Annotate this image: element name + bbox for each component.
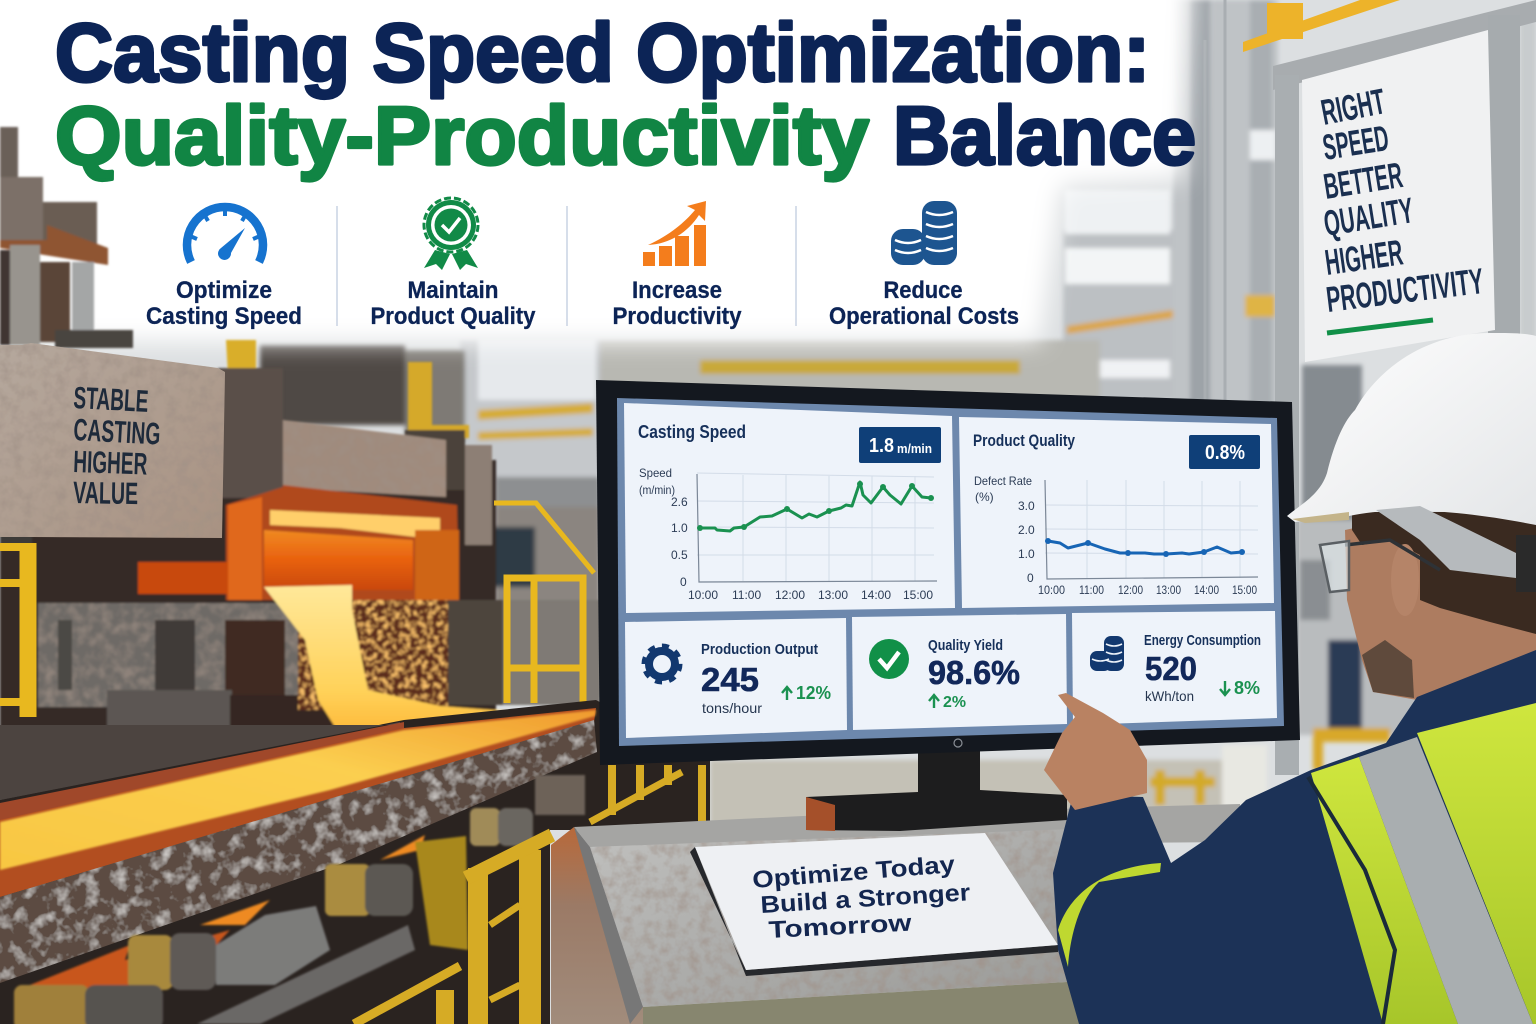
slab top surface xyxy=(0,708,596,897)
benefit text: costs xyxy=(829,277,1019,330)
paper note: Optimize Today xyxy=(751,851,957,894)
kpi: energy consumption: kWh/ton xyxy=(1145,688,1194,704)
panel: product quality chart: (%) xyxy=(975,490,994,504)
title: Casting Speed Optimization: xyxy=(55,6,1150,99)
furnace machinery xyxy=(0,340,600,810)
icon: quality rosette xyxy=(424,198,478,270)
hi-vis vest xyxy=(1311,757,1458,1024)
title xyxy=(55,6,1196,182)
panel: product quality chart: 1.0 xyxy=(1018,547,1035,561)
ear xyxy=(1391,544,1419,616)
worker xyxy=(1044,333,1536,1024)
benefit text: costs: Reduce xyxy=(884,277,962,304)
benefit text: costs: Operational Costs xyxy=(829,303,1019,330)
sign: stable casting xyxy=(0,343,225,538)
kpi: production output: 245 xyxy=(701,661,759,698)
panel: product quality chart: 0 xyxy=(1027,571,1034,585)
hair xyxy=(1352,512,1536,634)
panel: casting speed chart: 15:00 xyxy=(903,588,933,602)
line chart: speed xyxy=(697,481,934,531)
second rust plate xyxy=(283,420,446,497)
icon: coin stacks xyxy=(891,201,957,265)
panel: product quality chart: 10:00 xyxy=(1038,583,1065,597)
sign: stable casting: HIGHER xyxy=(73,444,148,482)
sign frame and yellow gantry xyxy=(1243,0,1536,775)
grey machinery xyxy=(38,603,298,707)
panel: product quality chart: Product Quality xyxy=(973,431,1075,450)
panel: product quality chart: 11:00 xyxy=(1079,583,1104,597)
title: Balance xyxy=(893,89,1196,182)
panel: casting speed chart: 0 xyxy=(680,575,687,589)
glasses xyxy=(1345,540,1440,570)
kpi: quality yield: 98.6% xyxy=(928,654,1020,691)
overhead sign: RIGHT xyxy=(1318,80,1388,133)
worker jacket xyxy=(1053,650,1536,1024)
line chart: defect rate xyxy=(1045,538,1245,557)
sign: stable casting: VALUE xyxy=(73,475,138,511)
benefit text: quality xyxy=(370,277,536,330)
rollers and brackets xyxy=(14,775,585,1024)
panel: casting speed chart: 13:00 xyxy=(818,588,848,602)
benefit text: optimize: Casting Speed xyxy=(146,303,302,330)
slab front face xyxy=(0,720,597,983)
panel: casting speed chart: 2.6 xyxy=(671,495,688,509)
benefit text: productivity: Productivity xyxy=(612,303,742,330)
kpi: quality yield: 2% xyxy=(943,694,966,711)
kpi: quality yield xyxy=(852,614,1067,730)
steel console xyxy=(551,804,1240,1024)
panel: casting speed chart: Casting Speed xyxy=(638,422,746,442)
icon: growth chart xyxy=(643,201,706,266)
kpi: production output: tons/hour xyxy=(702,700,762,716)
panel: product quality chart: 13:00 xyxy=(1156,583,1181,597)
paper note: Tomorrow xyxy=(768,910,913,944)
panel: casting speed chart: 11:00 xyxy=(732,588,761,602)
white header fade xyxy=(0,0,1192,342)
hot slab and conveyor xyxy=(0,700,710,1024)
panel: casting speed chart xyxy=(624,403,955,613)
overhead sign: SPEED xyxy=(1320,117,1391,168)
kpi: production output: Production Output xyxy=(701,641,818,658)
panel: casting speed chart: 1.0 xyxy=(671,521,688,535)
overhead sign: HIGHER xyxy=(1322,231,1405,283)
kpi: quality yield: Quality Yield xyxy=(928,637,1003,654)
panel: casting speed chart: Speed xyxy=(639,466,672,480)
sign: stable casting: STABLE xyxy=(73,380,149,419)
title: Quality-Productivity xyxy=(55,89,869,182)
sleeve stripe xyxy=(1058,863,1161,967)
panel: product quality chart: 2.0 xyxy=(1018,523,1035,537)
panel: casting speed chart: m/min xyxy=(897,441,932,456)
panel: product quality chart: 3.0 xyxy=(1018,499,1035,513)
top-left machine tower xyxy=(0,127,133,348)
benefit text: productivity: Increase xyxy=(632,277,722,304)
kpi: production output xyxy=(625,618,847,738)
paper note: Build a Stronger xyxy=(760,879,971,919)
yellow railings xyxy=(0,503,594,717)
kpi: energy consumption: Energy Consumption xyxy=(1144,632,1261,649)
kpi: production output: 12% xyxy=(796,683,831,703)
panel: casting speed chart: 0.5 xyxy=(671,548,688,562)
hard hat xyxy=(1287,333,1536,525)
icon: speedometer xyxy=(187,207,263,262)
sign: stable casting: CASTING xyxy=(73,412,161,452)
panel: product quality chart: 14:00 xyxy=(1194,583,1219,597)
panel: product quality chart: 12:00 xyxy=(1118,583,1143,597)
overhead sign: BETTER xyxy=(1321,154,1405,207)
molten flow xyxy=(264,585,520,735)
machinery behind ledge xyxy=(0,722,400,800)
paper note xyxy=(690,833,1058,976)
panel: product quality chart: Defect Rate xyxy=(974,474,1032,488)
monitor stand xyxy=(806,750,1067,831)
panel: casting speed chart: 10:00 xyxy=(688,588,718,602)
yellow posts xyxy=(226,340,283,410)
hot casting housing xyxy=(226,485,459,600)
benefit text: productivity xyxy=(612,277,742,330)
pointing hand xyxy=(1044,693,1147,810)
monitor xyxy=(596,380,1300,765)
panel: product quality chart xyxy=(959,417,1274,608)
monitor logo xyxy=(954,739,962,747)
panel: casting speed chart: 1.8 xyxy=(869,435,894,457)
panel: casting speed chart: (m/min) xyxy=(639,483,675,497)
benefit text: optimize: Optimize xyxy=(176,277,272,304)
panel: product quality chart: 15:00 xyxy=(1232,583,1257,597)
benefit text: quality: Product Quality xyxy=(370,303,536,330)
panel: casting speed chart: 14:00 xyxy=(861,588,891,602)
benefit text: optimize xyxy=(146,277,302,330)
kpi: energy consumption xyxy=(1072,611,1277,725)
overhead sign xyxy=(1302,30,1495,362)
benefits row xyxy=(146,198,1019,330)
benefit text: quality: Maintain xyxy=(408,277,498,304)
worker neck and face xyxy=(1345,520,1536,700)
panel: casting speed chart: 12:00 xyxy=(775,588,805,602)
panel: product quality chart: 0.8% xyxy=(1205,442,1245,464)
kpi: energy consumption: 8% xyxy=(1234,678,1260,698)
overhead sign: QUALITY xyxy=(1321,189,1416,244)
kpi: energy consumption: 520 xyxy=(1145,650,1197,687)
